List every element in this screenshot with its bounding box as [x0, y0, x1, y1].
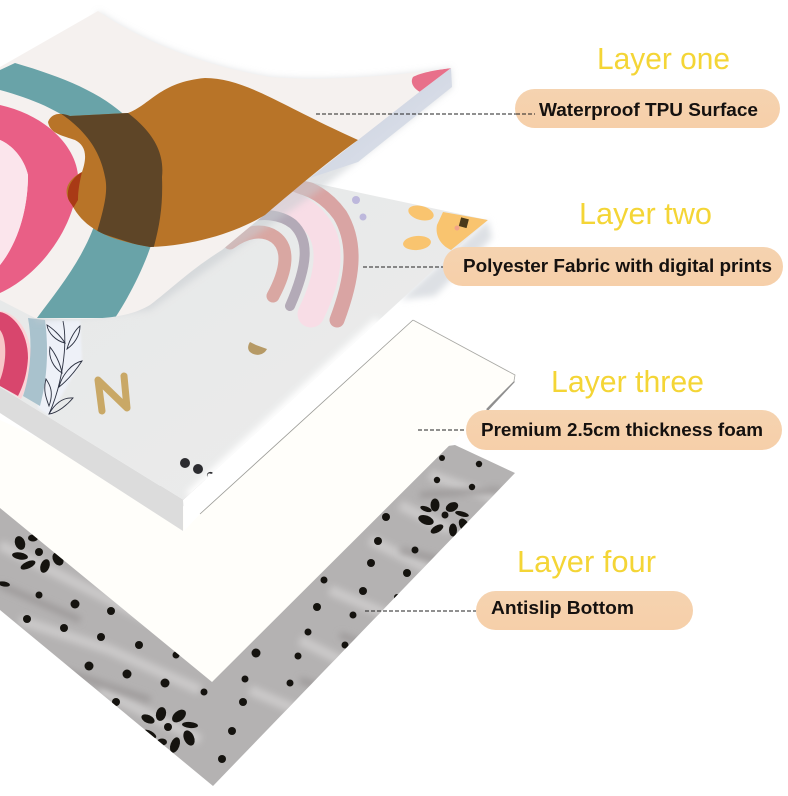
pink rainbow band: [0, 105, 78, 293]
layer two: printed polyester fabric: [0, 180, 492, 531]
rubber flower, bottom: [140, 706, 198, 754]
connector: layer three: [418, 429, 466, 431]
lavender patch behind leaves: [38, 320, 82, 416]
rubber flower, left: [0, 534, 66, 588]
side face left: [0, 387, 183, 531]
red overlap: [68, 172, 82, 210]
letter N: [98, 376, 127, 411]
layer three: foam sheet: [0, 320, 515, 682]
side face: [310, 68, 452, 178]
white haze along right edge: [190, 322, 380, 497]
top surface: [0, 11, 451, 319]
layer four: antislip bottom: [0, 445, 515, 786]
heading: layer two: Layer two: [579, 196, 712, 231]
label pill: layer one: [515, 89, 780, 128]
label pill: layer four: Antislip Bottom: [491, 598, 634, 618]
gold shape: [248, 342, 267, 355]
connector: layer one: [316, 113, 535, 115]
layer one: waterproof TPU surface: [0, 11, 452, 322]
corner pink mark: [412, 68, 452, 92]
connector: layer two: [363, 266, 443, 268]
lower left pink arc: [0, 311, 31, 399]
rainbow artwork: [230, 185, 351, 320]
heading: layer three: Layer three: [551, 364, 704, 399]
shadow: [35, 11, 452, 322]
side face right: [183, 220, 492, 531]
heading: layer one: Layer one: [597, 41, 730, 76]
dark teal overlap: [60, 113, 162, 250]
teal rainbow band: [0, 63, 162, 318]
label pill: layer four: [476, 591, 693, 630]
label pill: layer three: Premium 2.5cm thickness foam: [481, 420, 763, 440]
amber water stain: [48, 78, 358, 250]
blue band: [23, 318, 47, 406]
label pill: layer two: [443, 247, 783, 286]
black dots: [180, 458, 213, 477]
label pill: layer two: Polyester Fabric with digital prints: [463, 256, 772, 276]
leaf sprig: [45, 321, 82, 414]
top face: [0, 180, 488, 500]
sun artwork: [352, 196, 488, 251]
connector: layer four: [365, 610, 476, 612]
heading: layer four: Layer four: [517, 544, 656, 579]
dots: [23, 455, 482, 763]
label pill: layer one: Waterproof TPU Surface: [539, 100, 758, 120]
label pill: layer three: [466, 410, 782, 450]
rubber flower, upper right: [417, 498, 471, 536]
